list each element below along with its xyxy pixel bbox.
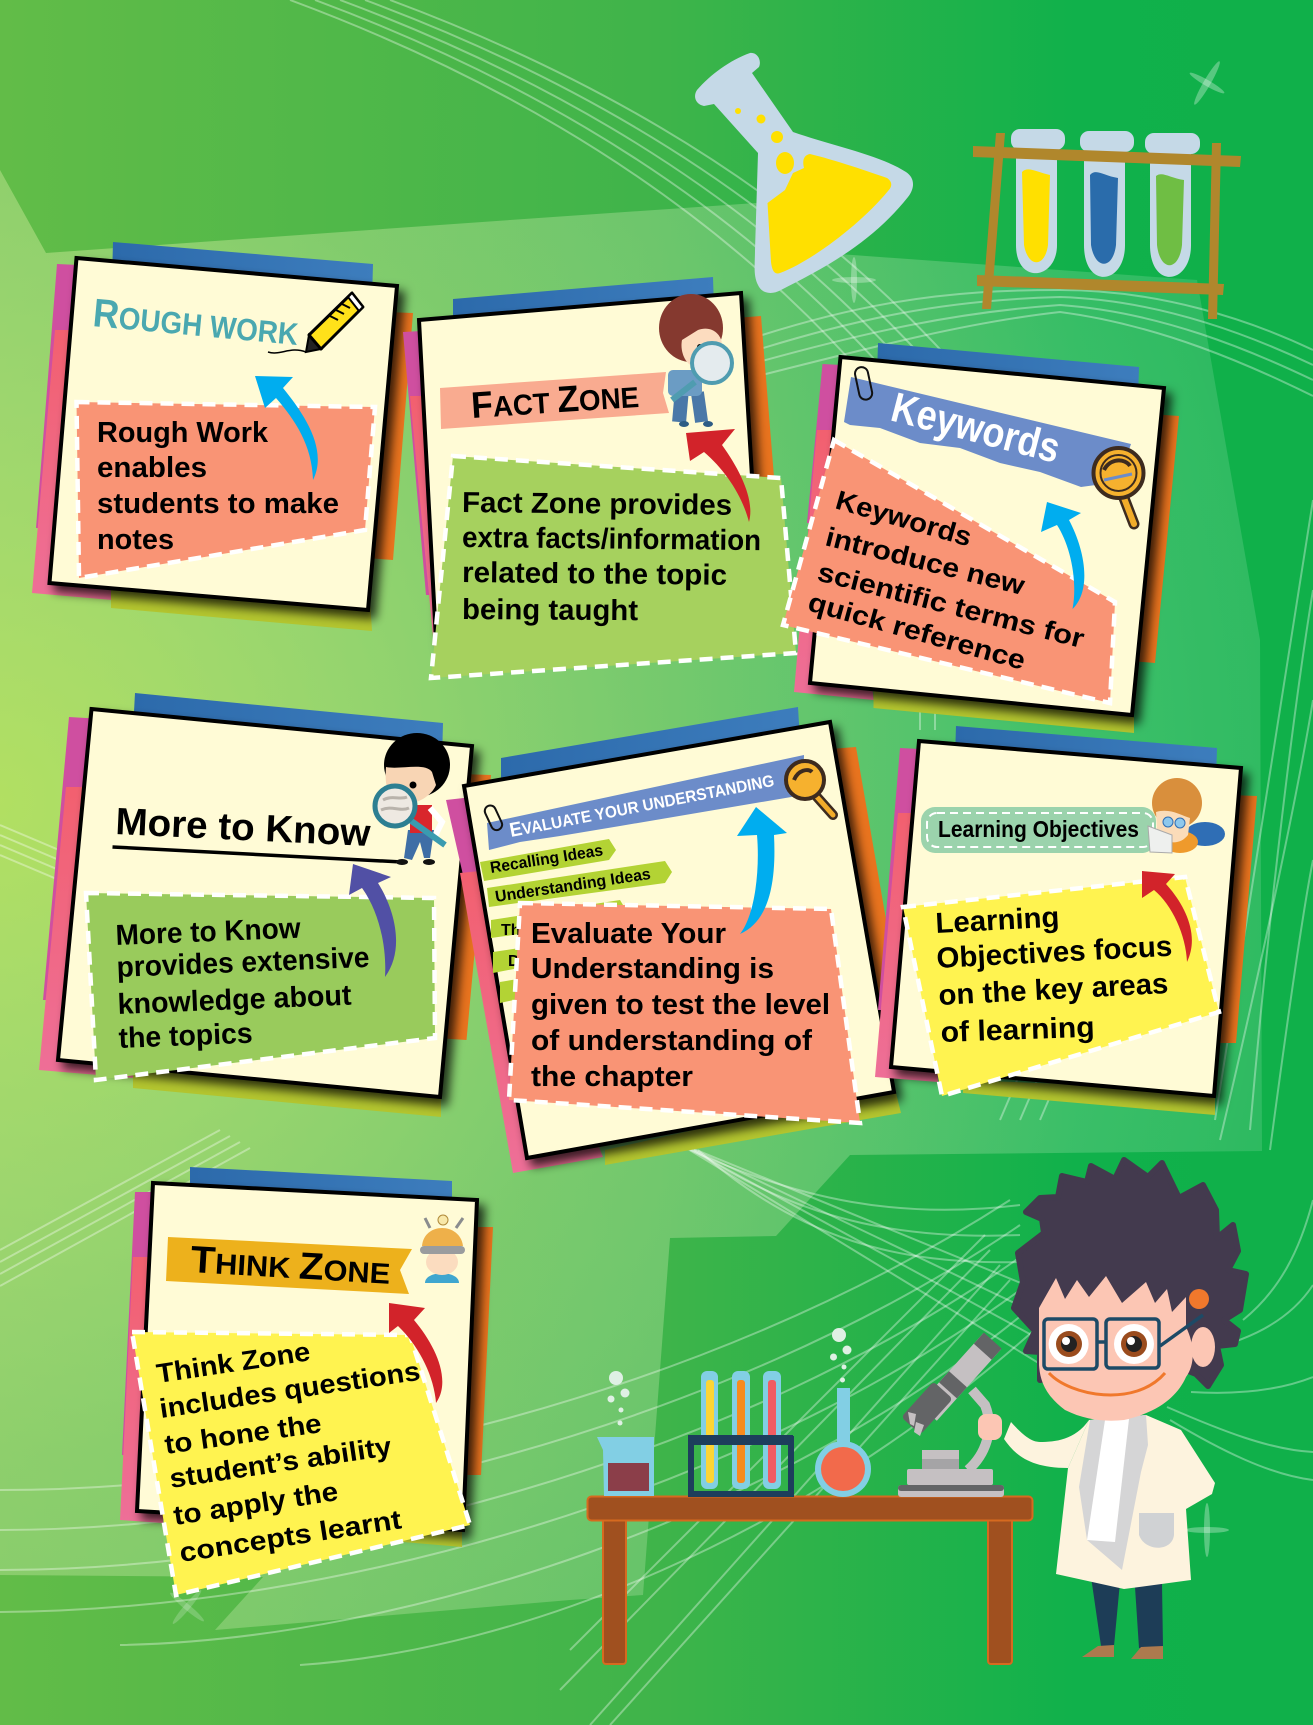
text: evaluate description: the chapter [531, 1061, 693, 1093]
illustration: test tubes in rack [688, 1371, 793, 1494]
icon: magnifying glass [786, 761, 833, 815]
text: more to know description: provides extensive [116, 942, 370, 984]
text: fact zone description: extra facts/information [462, 522, 761, 557]
text: think zone description: to apply the [171, 1476, 340, 1531]
text: evaluate description: given to test the level [531, 989, 830, 1021]
tag: thinking: Th [501, 922, 521, 939]
heading: more to know: More to Know [115, 801, 372, 855]
panel: keywords [783, 343, 1179, 733]
panel: evaluate your understanding [446, 707, 901, 1173]
callout: fact zone [431, 456, 796, 678]
icon: paperclip [854, 366, 873, 401]
list: question types [480, 839, 672, 1003]
icon: pencil [268, 293, 363, 353]
callout: evaluate [509, 903, 860, 1123]
text: keywords description [805, 485, 1088, 676]
illustration: scientist [978, 1160, 1246, 1659]
smile [1049, 1373, 1165, 1395]
illustration: beaker [597, 1371, 654, 1496]
text: learning objectives description: Objectives focus [936, 931, 1173, 975]
arrow: red [389, 1303, 442, 1403]
heading: learning objectives badge [921, 807, 1156, 853]
icon: test tube rack [973, 129, 1241, 319]
arrow: red [1142, 871, 1192, 962]
shoes [1082, 1645, 1163, 1659]
text: more to know description: knowledge about [117, 980, 352, 1021]
heading: learning objectives badge: Learning Objectives [938, 816, 1139, 842]
arrow: blue [737, 807, 787, 934]
illustration: microscope [898, 1333, 1004, 1497]
text: evaluate description: of understanding of [531, 1025, 812, 1057]
callout: keywords [783, 440, 1115, 703]
text: learning objectives description: of learning [940, 1012, 1095, 1049]
tag: doing [493, 942, 560, 973]
icon: thinking boy [420, 1215, 465, 1283]
text: think zone description: student’s ability [167, 1431, 393, 1494]
text: fact zone description: Fact Zone provides [462, 487, 732, 522]
panel: think zone [120, 1167, 493, 1595]
text: fact zone description: being taught [462, 594, 639, 627]
heading: fact zone banner [440, 372, 669, 429]
text: keywords description: quick reference [805, 587, 1029, 676]
orange marker dot [1189, 1289, 1209, 1309]
hair back [1014, 1160, 1246, 1386]
text: evaluate description: Understanding is [531, 953, 774, 985]
tag: fifth [500, 972, 560, 1003]
text: rough work description: notes [97, 524, 174, 556]
heading: rough work: ROUGH WORK [91, 291, 301, 354]
icon: sparkle top right [1177, 51, 1237, 115]
panel: more to know [39, 693, 491, 1117]
eyes [1049, 1324, 1154, 1364]
glasses [1044, 1315, 1203, 1369]
text: fact zone description [462, 487, 761, 627]
text: learning objectives description: on the key areas [938, 968, 1169, 1012]
text: keywords description: Keywords [832, 485, 975, 552]
heading: keywords banner [844, 377, 1131, 487]
icon: sparkle lower left [156, 1576, 218, 1638]
text: evaluate description [531, 918, 830, 1093]
heading: keywords banner: Keywords [887, 383, 1065, 472]
panel: learning objectives [875, 726, 1257, 1115]
face [1039, 1276, 1193, 1421]
callout: more to know [86, 893, 435, 1080]
text: think zone description [154, 1336, 422, 1568]
text: more to know description: the topics [118, 1018, 253, 1055]
icon: paperclip [483, 804, 504, 832]
icon: boy with magnifier [659, 294, 732, 427]
icon: sparkle mid [832, 257, 876, 303]
heading: evaluate banner: EVALUATE YOUR UNDERSTANDING [508, 769, 776, 842]
text: keywords description: scientific terms for [815, 557, 1088, 654]
icon: kid reading [1148, 778, 1225, 853]
illustration: round flask [815, 1328, 871, 1497]
tag: doing: D [508, 953, 520, 970]
arrow: blue [1041, 502, 1084, 609]
callout: learning objectives [903, 877, 1219, 1096]
arrow: purple [349, 864, 396, 977]
tag: thinking [491, 900, 626, 939]
tag: understanding ideas: Understanding Ideas [494, 866, 652, 906]
text: more to know description [115, 913, 370, 1055]
text: more to know description: More to Know [115, 913, 302, 952]
icon: sparkle lower right [1185, 1503, 1229, 1557]
callout: rough work [76, 402, 375, 578]
heading: fact zone banner: FACT ZONE [470, 374, 640, 426]
text: rough work description: students to make [97, 488, 339, 520]
heading: think zone banner: THINK ZONE [189, 1239, 392, 1293]
text: evaluate description: Evaluate Your [531, 918, 726, 950]
text: keywords description: introduce new [823, 522, 1029, 601]
hand [978, 1414, 1002, 1440]
panel: rough work [32, 242, 413, 631]
icon: magnifying glass [1094, 448, 1144, 524]
icon: conical flask [695, 53, 913, 293]
icon: boy with magnifier [375, 733, 450, 865]
text: think zone description: Think Zone [154, 1336, 312, 1389]
panel: fact zone [403, 277, 796, 678]
callout: think zone [132, 1332, 470, 1595]
text: think zone description: to hone the [163, 1408, 323, 1460]
text: rough work description: enables [97, 452, 207, 484]
text: think zone description: includes questions [157, 1356, 422, 1424]
text: think zone description: concepts learnt [177, 1504, 403, 1568]
ear [1191, 1327, 1215, 1367]
lab coat [1004, 1415, 1215, 1589]
text: learning objectives description: Learning [935, 902, 1060, 940]
text: rough work description: Rough Work [97, 417, 269, 449]
text: fact zone description: related to the topic [462, 557, 727, 592]
text: rough work description [97, 417, 339, 556]
arrow: red [686, 429, 750, 522]
illustration: lab table [588, 1496, 1032, 1664]
pants [1086, 1542, 1163, 1648]
text: learning objectives description [935, 902, 1173, 1049]
tag: recalling ideas: Recalling Ideas [489, 842, 604, 877]
arrow: blue [255, 376, 318, 480]
